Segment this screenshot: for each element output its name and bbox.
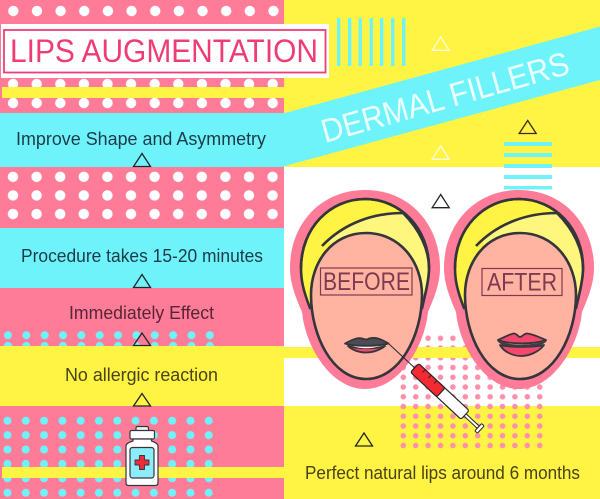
plunger rod — [463, 413, 479, 428]
face: before — [290, 190, 440, 389]
label: after: AFTER — [487, 268, 557, 296]
lips: after — [497, 334, 547, 356]
pink outline — [290, 190, 440, 389]
banner: dermal fillers: DERMAL FILLERS — [317, 44, 573, 150]
panel: left column bands — [0, 0, 284, 499]
yellow strip across the right side — [284, 347, 600, 358]
text: natural lips duration: Perfect natural lips around 6 months — [305, 463, 580, 483]
title: lips augmentation — [1, 24, 329, 78]
pink outline — [444, 190, 594, 389]
bottle cap — [136, 426, 148, 432]
label: before: BEFORE — [323, 268, 410, 296]
text: improve shape: Improve Shape and Asymmetry — [16, 129, 266, 149]
icon: medicine bottle — [126, 426, 158, 486]
horizontal cyan stripes — [504, 142, 552, 190]
face shape — [465, 233, 576, 379]
panel: right column background — [284, 0, 600, 499]
needle — [389, 344, 415, 369]
red cross — [135, 456, 149, 470]
face shape — [311, 233, 422, 379]
barrel empty — [429, 381, 469, 419]
hair — [455, 199, 583, 308]
lips: before — [345, 338, 388, 352]
bottle label — [130, 448, 154, 478]
vertical cyan stripes — [337, 18, 405, 66]
face: after — [444, 190, 594, 389]
triangle markers — [134, 37, 536, 446]
dot pattern behind faces — [397, 333, 546, 450]
title: lips augmentation: LIPS AUGMENTATION — [10, 33, 318, 69]
bottle collar — [130, 430, 154, 439]
text: procedure time: Procedure takes 15-20 minutes — [21, 246, 263, 266]
hair — [301, 199, 429, 308]
text: no allergic reaction: No allergic reaction — [65, 365, 218, 385]
text: immediate effect: Immediately Effect — [69, 303, 214, 323]
barrel filled — [411, 363, 445, 397]
bottle body — [126, 439, 158, 486]
plunger handle — [475, 424, 484, 433]
icon: syringe — [385, 340, 485, 434]
